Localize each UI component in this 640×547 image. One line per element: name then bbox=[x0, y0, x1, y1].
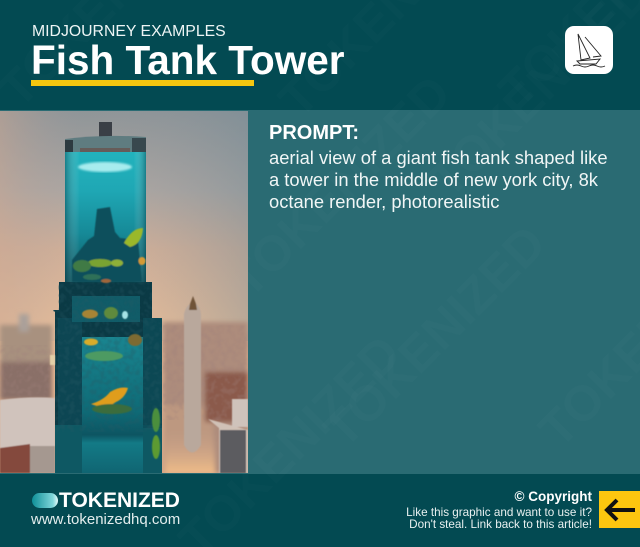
logo mark bbox=[32, 493, 58, 508]
prompt text bbox=[269, 147, 608, 212]
background watermark pattern: TOKENIZED bbox=[218, 65, 461, 308]
title underline bbox=[31, 80, 254, 86]
prompt text: a tower in the middle of new york city, 8k bbox=[269, 169, 598, 190]
logo: Tokenized bbox=[32, 489, 180, 512]
upper tank bbox=[65, 152, 146, 282]
AI-generated image: fish tank tower bbox=[0, 111, 248, 473]
roof block bbox=[99, 122, 112, 137]
tower bbox=[50, 122, 163, 473]
arrow box bbox=[599, 491, 640, 528]
city background bbox=[0, 314, 248, 473]
prompt text: octane render, photorealistic bbox=[269, 191, 499, 212]
panel: prompt background bbox=[0, 110, 640, 474]
copyright note bbox=[406, 506, 592, 531]
website url: www.tokenizedhq.com bbox=[31, 511, 180, 528]
icon: left arrow bbox=[604, 498, 635, 522]
icon: Midjourney sailboat bbox=[565, 26, 613, 74]
copyright note: Like this graphic and want to use it? bbox=[406, 506, 592, 519]
logo wordmark: TOKENIZED bbox=[59, 489, 180, 512]
copyright note: Don't steal. Link back to this article! bbox=[409, 518, 592, 531]
prompt text: aerial view of a giant fish tank shaped like bbox=[269, 147, 608, 168]
section label: MIDJOURNEY EXAMPLES bbox=[32, 23, 226, 40]
tank interior: rocks and plants bbox=[50, 207, 160, 459]
lower tower body bbox=[53, 282, 162, 473]
foreground rooftops bbox=[0, 397, 248, 473]
copyright heading: © Copyright bbox=[515, 489, 592, 504]
background watermark pattern: TOKENIZED bbox=[313, 215, 556, 458]
title: Fish Tank Tower bbox=[31, 37, 345, 83]
prompt heading: PROMPT: bbox=[269, 122, 359, 144]
distant skyscraper bbox=[184, 296, 201, 452]
